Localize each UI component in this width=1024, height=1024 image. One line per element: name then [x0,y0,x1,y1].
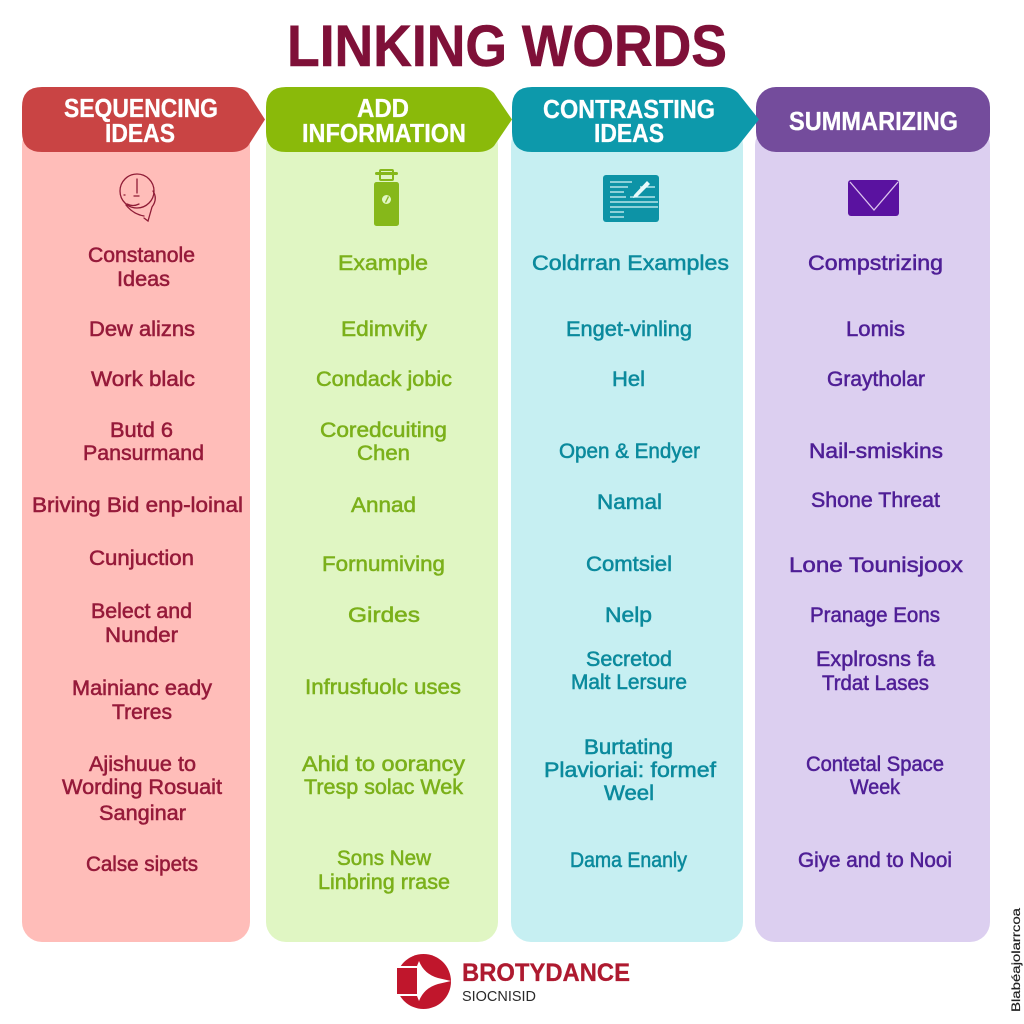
word list: contrasting: Namal [597,490,662,514]
word list: sequencing: Calse sipets [86,852,198,876]
word list: add information: Condack jobic [316,367,452,391]
word list: sequencing: Constanole [88,243,195,267]
word list: contrasting: Dama Enanly [570,848,687,872]
word list: sequencing: Mainianc eady [72,676,212,700]
word list: add information: Linbring rrase [318,870,450,894]
word list: add information: Girdes [348,603,420,627]
word list: summarizing: Pranage Eons [810,603,940,627]
word list: contrasting: Coldrran Examples [532,251,729,275]
icon: green bottle [374,170,399,226]
word list: contrasting: Nelp [605,603,652,627]
word list: contrasting: Burtating [584,735,673,759]
word list: add information [302,251,465,894]
header: add information [266,87,512,152]
word list: add information: Infrusfuolc uses [305,675,461,699]
word list: contrasting: Secretod [586,647,672,671]
header: summarizing [756,87,990,152]
word list: contrasting: Enget-vinling [566,317,692,341]
word list: contrasting: Weel [604,781,654,805]
word list: add information: Chen [357,441,410,465]
word list: sequencing: Cunjuction [89,546,194,570]
word list: contrasting [532,251,729,872]
brand subtitle: SIOCNISID [462,988,536,1005]
word list: summarizing: Shone Threat [811,488,940,512]
word list: sequencing: Butd 6 [110,418,173,442]
word list: sequencing: Ideas [117,267,170,291]
word list: summarizing: Graytholar [827,367,925,391]
word list: summarizing: Trdat Lases [822,671,929,695]
word list: sequencing: Sanginar [99,801,186,825]
word list: add information: Sons New [337,846,431,870]
word list: summarizing: Lone Tounisjoox [789,553,963,577]
word list: sequencing: Wording Rosuait [62,775,222,799]
word list: sequencing: Ajishuue to [89,752,196,776]
word list: add information: Edimvify [341,317,427,341]
word list: sequencing: Pansurmand [83,441,204,465]
word list: sequencing: Treres [112,700,172,724]
word list: summarizing: Week [850,775,900,799]
panel: contrasting ideas [511,125,743,942]
header: contrasting ideas [512,87,759,152]
header: add information: ADD [357,93,409,123]
header: sequencing ideas [22,87,265,152]
word list: contrasting: Hel [612,367,645,391]
word list: summarizing [789,251,963,872]
word list: add information: Annad [351,493,416,517]
icon: envelope [848,180,899,216]
header: contrasting ideas: IDEAS [594,118,664,148]
word list: sequencing [32,243,243,876]
word list: contrasting: Open & Endyer [559,439,700,463]
word list: summarizing: Lomis [846,317,905,341]
word list: sequencing: Nunder [105,623,178,647]
icon: logo mark [396,954,451,1009]
word list: sequencing: Dew alizns [89,317,195,341]
word list: add information: Coredcuiting [320,418,447,442]
word list: summarizing: Explrosns fa [816,647,935,671]
word list: sequencing: Briving Bid enp-loinal [32,493,243,517]
word list: summarizing: Contetal Space [806,752,944,776]
title: LINKING WORDS [287,14,727,79]
word list: add information: Fornumiving [322,552,445,576]
word list: add information: Example [338,251,428,275]
word list: summarizing: Giye and to Nooi [798,848,952,872]
header: sequencing ideas: SEQUENCING [64,93,218,123]
brand name: BROTYDANCE [462,959,630,987]
footer logo [396,954,630,1009]
word list: contrasting: Plavioriai: formef [544,758,716,782]
panel: sequencing ideas [22,125,250,942]
word list: sequencing: Work blalc [91,367,195,391]
word list: add information: Ahid to oorancy [302,752,465,776]
icon: document with pen [603,175,659,222]
header: contrasting ideas: CONTRASTING [543,94,715,124]
panel: summarizing [755,125,990,942]
word list: contrasting: Comtsiel [586,552,672,576]
vertical credit text: Blabéajolarrcoa [1009,908,1023,1012]
header: sequencing ideas: IDEAS [105,118,175,148]
word list: summarizing: Compstrizing [808,251,943,275]
word list: contrasting: Malt Lersure [571,670,687,694]
word list: sequencing: Belect and [91,599,192,623]
word list: add information: Tresp solac Wek [304,775,463,799]
header: summarizing: SUMMARIZING [789,106,958,136]
icon: thinking face [120,174,155,221]
panel: add information [266,125,498,942]
header: add information: INFORMATION [302,118,466,148]
word list: summarizing: Nail-smiskins [809,439,943,463]
